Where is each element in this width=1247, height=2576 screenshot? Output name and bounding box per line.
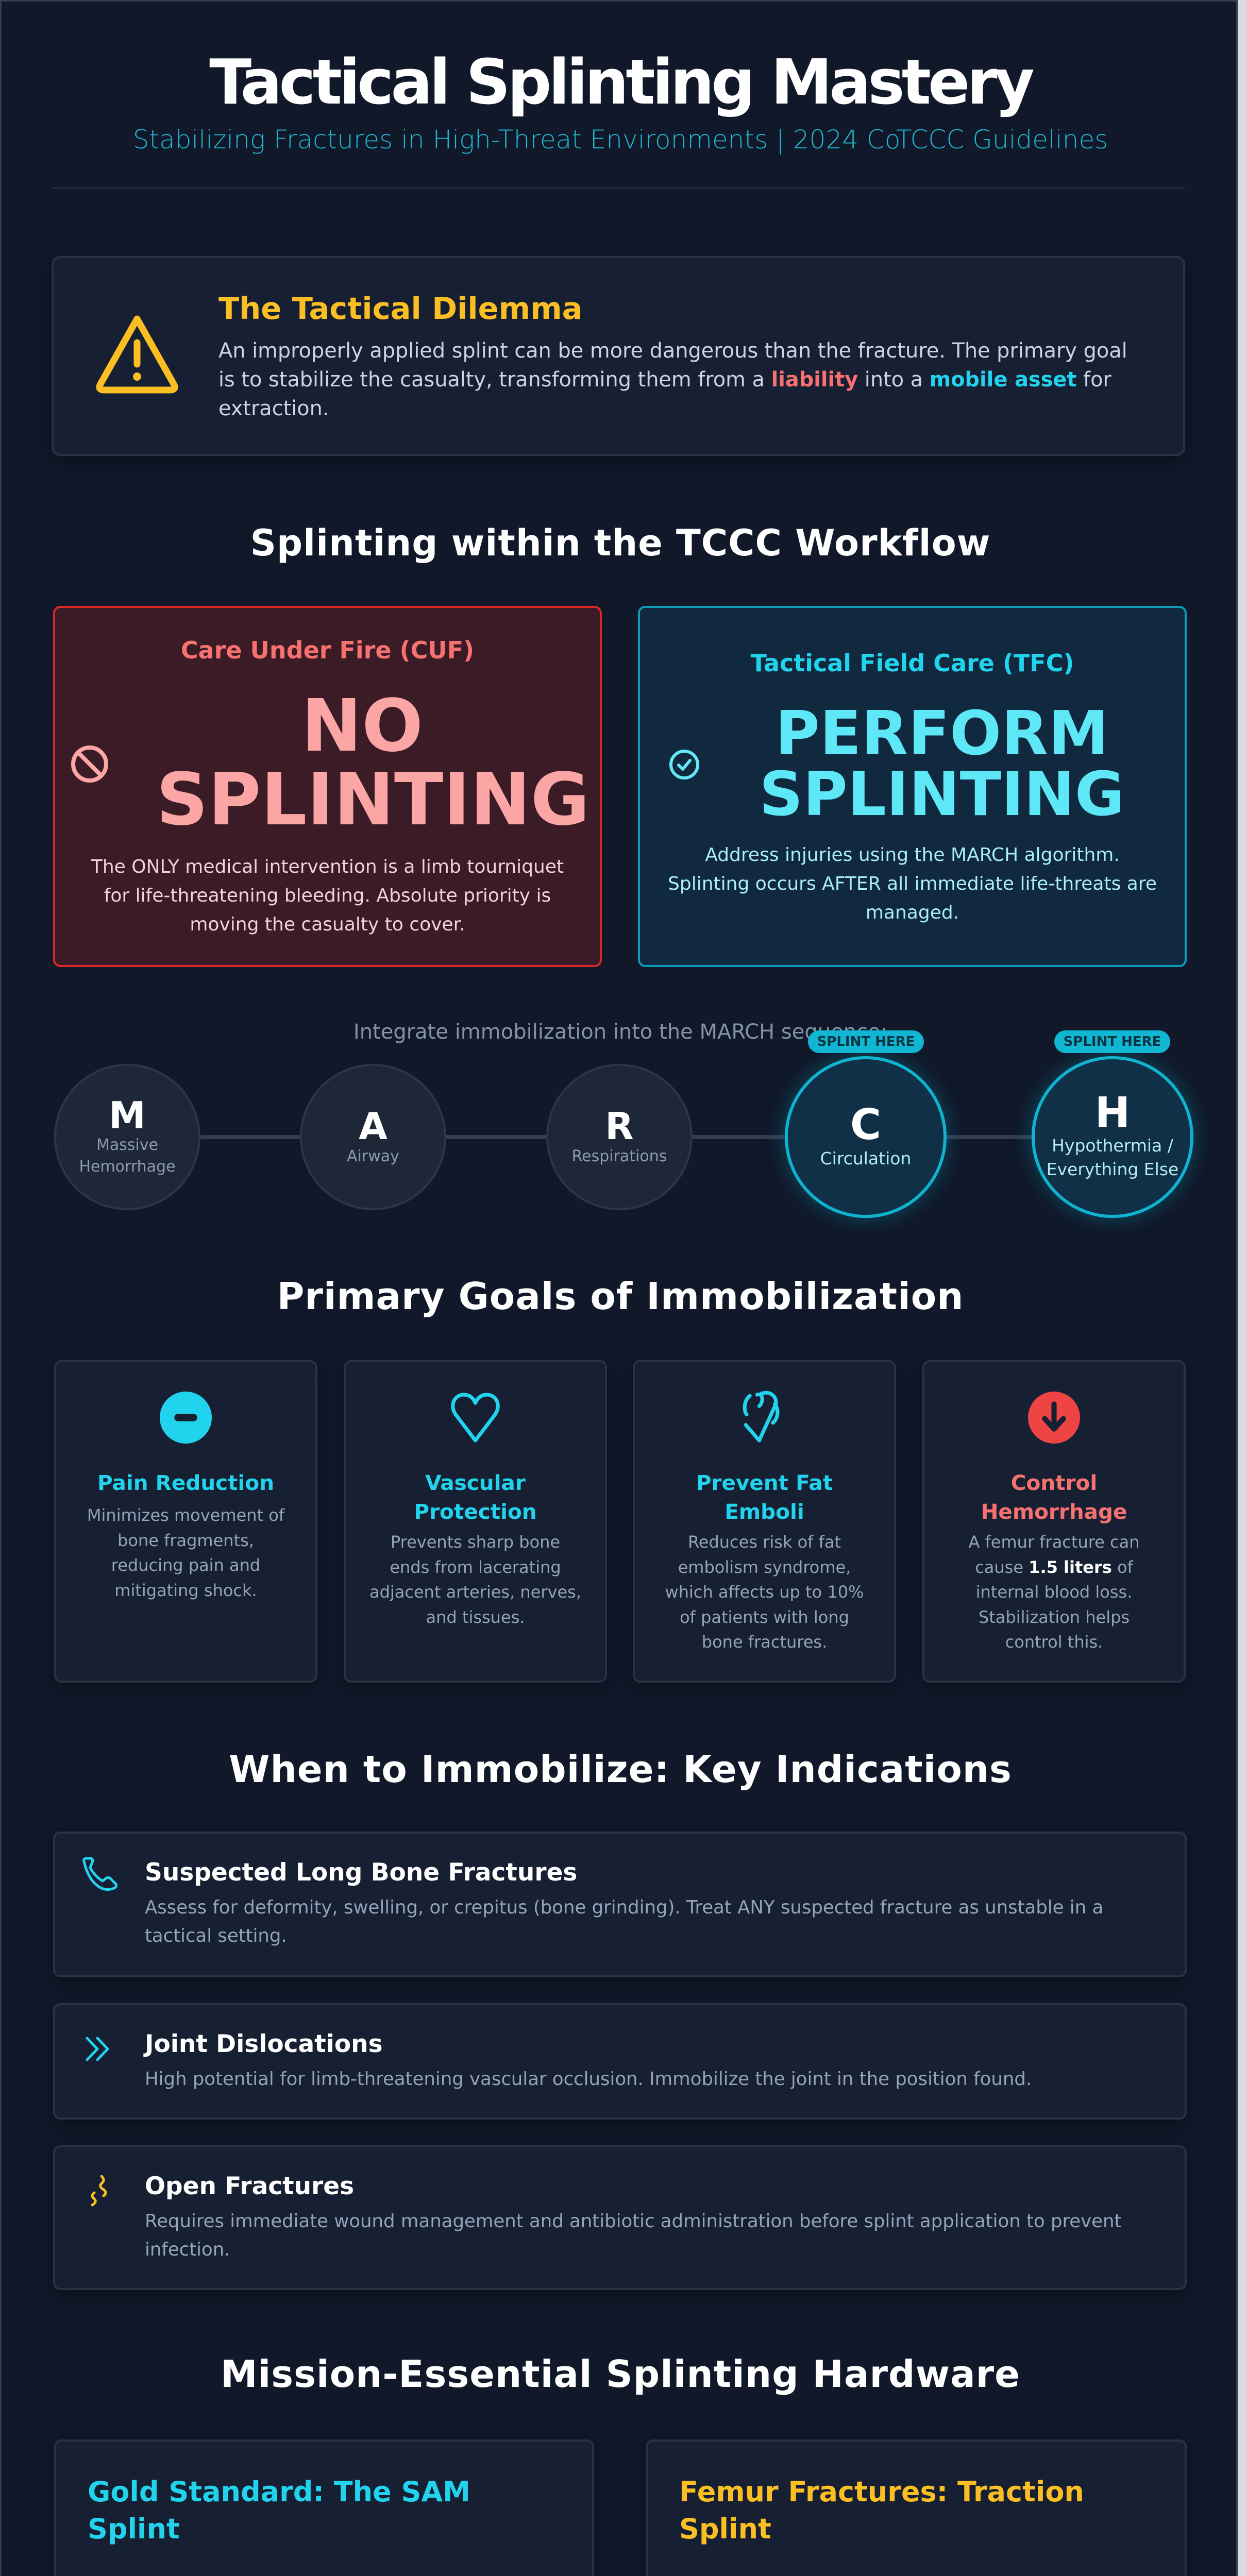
description: bone fractures. [702, 1632, 827, 1652]
description: infection. [145, 2239, 230, 2260]
step: H [1032, 1056, 1193, 1218]
step: M: M [109, 1094, 146, 1137]
description: control this. [1005, 1632, 1103, 1652]
icon: minus circle [160, 1392, 212, 1444]
title [88, 2476, 470, 2545]
description: High potential for limb-threatening vascular occlusion. Immobilize the joint in the position found. [145, 2069, 1032, 2090]
heading: hardware: Mission-Essential Splinting Hardware [221, 2352, 1020, 2396]
text: CUF body: The ONLY medical intervention is a limb tourniquet [91, 856, 564, 877]
text: CUF body: for life-threatening bleeding. Absolute priority is [104, 885, 551, 906]
step: A: Airway [347, 1147, 399, 1165]
description: tactical setting. [145, 1925, 287, 1946]
title: Femur Fractures: Traction [679, 2476, 1084, 2508]
title: Protection [414, 1499, 537, 1524]
description: Requires immediate wound management and antibiotic administration before splint application to prevent [145, 2211, 1121, 2232]
card: control hemorrhage [922, 1360, 1186, 1683]
card: SAM splint [54, 2439, 594, 2576]
title: Vascular [425, 1470, 526, 1495]
description: Assess for deformity, swelling, or crepitus (bone grinding). Treat ANY suspected fracture as unstable in a [145, 1897, 1103, 1918]
icon: warning triangle [96, 315, 178, 394]
text: perform splinting [759, 698, 1125, 829]
description: which affects up to 10% [665, 1582, 864, 1602]
title: Gold Standard: The SAM [88, 2476, 470, 2508]
text: dilemma body [218, 339, 1127, 420]
description: Minimizes movement of [87, 1505, 284, 1525]
subtitle: Stabilizing Fractures in High-Threat Environments | 2024 CoTCCC Guidelines [133, 125, 1108, 155]
description: Stabilization helps [979, 1607, 1130, 1627]
description: cause 1.5 liters of [975, 1557, 1133, 1577]
heading: primary goals: Primary Goals of Immobilization [277, 1275, 964, 1318]
title: Pain Reduction [97, 1470, 274, 1495]
list: traction specs [648, 2442, 1185, 2576]
text: no splinting [156, 684, 590, 842]
icon: check circle [669, 750, 699, 779]
description: and tissues. [426, 1607, 525, 1627]
title [679, 2476, 1084, 2545]
step: R: Respirations [572, 1147, 667, 1165]
title [696, 1470, 833, 1524]
badge: splint here H [1054, 1030, 1170, 1053]
step: C: Circulation [820, 1148, 911, 1168]
step: M: Massive [96, 1136, 158, 1154]
description [87, 1505, 285, 1600]
icon: phone [82, 1857, 117, 1891]
text: no splinting: SPLINTING [156, 758, 590, 842]
description [665, 1532, 864, 1652]
icon: emboli [743, 1391, 780, 1443]
step: A [300, 1064, 446, 1210]
card: vascular protection [344, 1360, 607, 1683]
badge: splint here C: SPLINT HERE [817, 1034, 915, 1049]
description: mitigating shock. [114, 1581, 257, 1600]
step: R [546, 1064, 693, 1210]
title: Joint Dislocations [145, 2030, 383, 2058]
text: TFC body: Address injuries using the MARCH algorithm. [705, 844, 1120, 866]
title: Splint [88, 2513, 180, 2545]
card: prevent fat emboli [633, 1360, 896, 1683]
description: Reduces risk of fat [688, 1532, 841, 1552]
step: C: C [850, 1100, 881, 1149]
badge: splint here H: SPLINT HERE [1064, 1034, 1161, 1049]
caption: MARCH: Integrate immobilization into the MARCH sequence: [353, 1020, 887, 1044]
title: Tactical Splinting Mastery [209, 47, 1032, 118]
icon: ban [71, 745, 108, 783]
description [145, 1897, 1103, 1946]
description: A femur fracture can [968, 1532, 1140, 1552]
text: CUF body [91, 856, 564, 935]
text: TFC body [668, 844, 1157, 923]
step: H: H [1095, 1089, 1130, 1138]
text: perform splinting: PERFORM [775, 698, 1109, 769]
heading: CUF: Care Under Fire (CUF) [181, 636, 474, 664]
text: dilemma body: An improperly applied splint can be more dangerous than the fracture. The primary goal [218, 339, 1127, 363]
badge: splint here C [808, 1030, 924, 1053]
heading: TFC: Tactical Field Care (TFC) [750, 649, 1074, 677]
description: bone fragments, [117, 1530, 254, 1550]
text: TFC body: managed. [866, 902, 959, 923]
title [981, 1470, 1127, 1524]
description: ends from lacerating [390, 1557, 561, 1577]
step: C [785, 1056, 947, 1218]
step: A: A [359, 1105, 387, 1148]
step: M: Hemorrhage [79, 1158, 176, 1176]
title: Open Fractures [145, 2172, 354, 2200]
card: open fractures [53, 2145, 1187, 2290]
card: joint dislocations [53, 2003, 1187, 2120]
description: of patients with long [680, 1607, 849, 1627]
description: Prevents sharp bone [391, 1532, 560, 1552]
icon: down arrow circle [1028, 1392, 1080, 1444]
title: Suspected Long Bone Fractures [145, 1858, 577, 1887]
icon: heart [451, 1393, 500, 1443]
title: Splint [679, 2513, 771, 2545]
text: perform splinting: SPLINTING [759, 758, 1125, 829]
text: CUF body: moving the casualty to cover. [190, 914, 465, 935]
title: Hemorrhage [981, 1499, 1127, 1524]
text: dilemma body: extraction. [218, 397, 329, 420]
heading: the tactical dilemma: The Tactical Dilemma [218, 291, 582, 326]
icon: squiggle [91, 2175, 107, 2206]
text: no splinting: NO [301, 684, 423, 768]
description: adjacent arteries, nerves, [369, 1582, 581, 1602]
card: long bone fractures [53, 1832, 1187, 1977]
title [414, 1470, 537, 1524]
heading: TCCC workflow: Splinting within the TCCC Workflow [250, 522, 990, 564]
description [369, 1532, 581, 1627]
description [145, 2211, 1121, 2260]
text: dilemma body: is to stabilize the casualty, transforming them from a liability into a mobile asset for [218, 368, 1111, 392]
step: H: Hypothermia / [1052, 1136, 1173, 1156]
panel: tactical dilemma [52, 256, 1185, 456]
panel: care under fire [53, 606, 602, 967]
heading: key indications: When to Immobilize: Key Indications [229, 1748, 1012, 1791]
card: traction splint [646, 2439, 1187, 2576]
text: TFC body: Splinting occurs AFTER all immediate life-threats are [668, 873, 1157, 894]
description: reducing pain and [111, 1555, 260, 1575]
description [968, 1532, 1140, 1652]
step: H: Everything Else [1047, 1159, 1178, 1179]
title: Emboli [724, 1499, 804, 1524]
card: pain reduction [54, 1360, 317, 1683]
panel: tactical field care [638, 606, 1187, 967]
description: internal blood loss. [976, 1582, 1132, 1602]
list: SAM specs [56, 2442, 592, 2576]
title: Control [1011, 1470, 1097, 1495]
description: embolism syndrome, [678, 1557, 851, 1577]
icon: chevrons [86, 2037, 109, 2061]
step: R: R [605, 1105, 634, 1148]
title: Prevent Fat [696, 1470, 833, 1495]
step: M [54, 1064, 200, 1210]
